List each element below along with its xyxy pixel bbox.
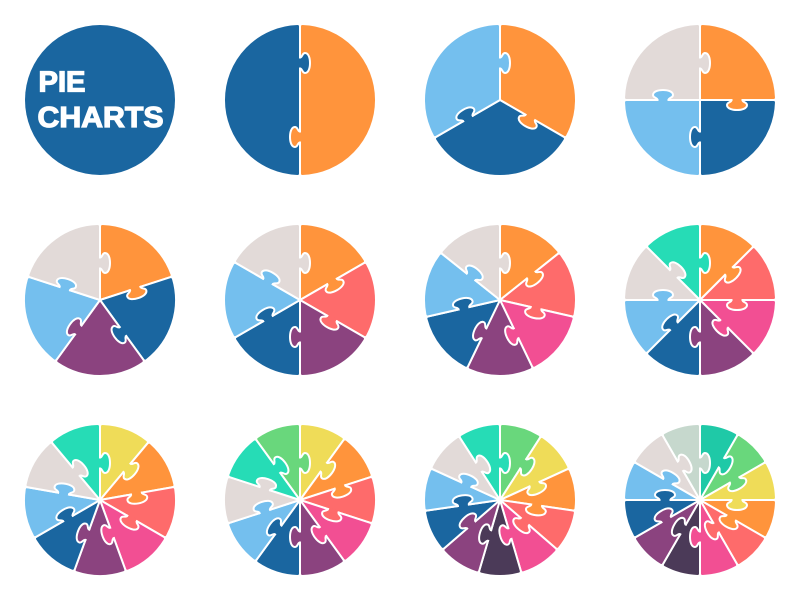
pie chart: 11 segments <box>416 414 586 584</box>
puzzle tabs <box>53 453 148 546</box>
puzzle tabs <box>55 253 148 346</box>
puzzle tabs <box>452 253 546 347</box>
slices <box>416 414 586 584</box>
puzzle tabs <box>653 253 747 347</box>
title text: CHARTS <box>38 102 164 134</box>
puzzle tabs <box>454 53 540 131</box>
title badge: pie charts <box>25 25 175 175</box>
slices <box>616 416 784 584</box>
puzzle tabs <box>254 253 346 347</box>
pie chart: 9 segments <box>10 411 186 588</box>
title text: PIE <box>38 66 86 98</box>
slices <box>624 24 776 176</box>
slices <box>10 411 186 588</box>
pie chart: 5 segments <box>0 208 194 404</box>
slices <box>214 413 386 587</box>
puzzle tabs <box>252 453 353 547</box>
pie chart: 8 segments <box>609 209 791 391</box>
pie chart: 3 segments <box>396 16 576 204</box>
slices <box>396 16 576 204</box>
puzzle tabs <box>290 53 310 147</box>
pie chart: 4 segments <box>624 24 776 176</box>
pie chart: 10 segments <box>214 413 386 587</box>
puzzle tabs <box>653 453 748 547</box>
puzzle tabs <box>653 53 747 147</box>
slices <box>609 209 791 391</box>
slices <box>0 208 194 404</box>
puzzle tabs <box>452 453 548 546</box>
pie chart: 6 segments <box>202 206 398 394</box>
pie chart: 2 segments <box>224 24 376 176</box>
slices <box>202 206 398 394</box>
pie chart: 12 segments <box>616 416 784 584</box>
slices <box>224 24 376 176</box>
pie chart: 7 segments <box>413 207 596 394</box>
slices <box>413 207 596 394</box>
